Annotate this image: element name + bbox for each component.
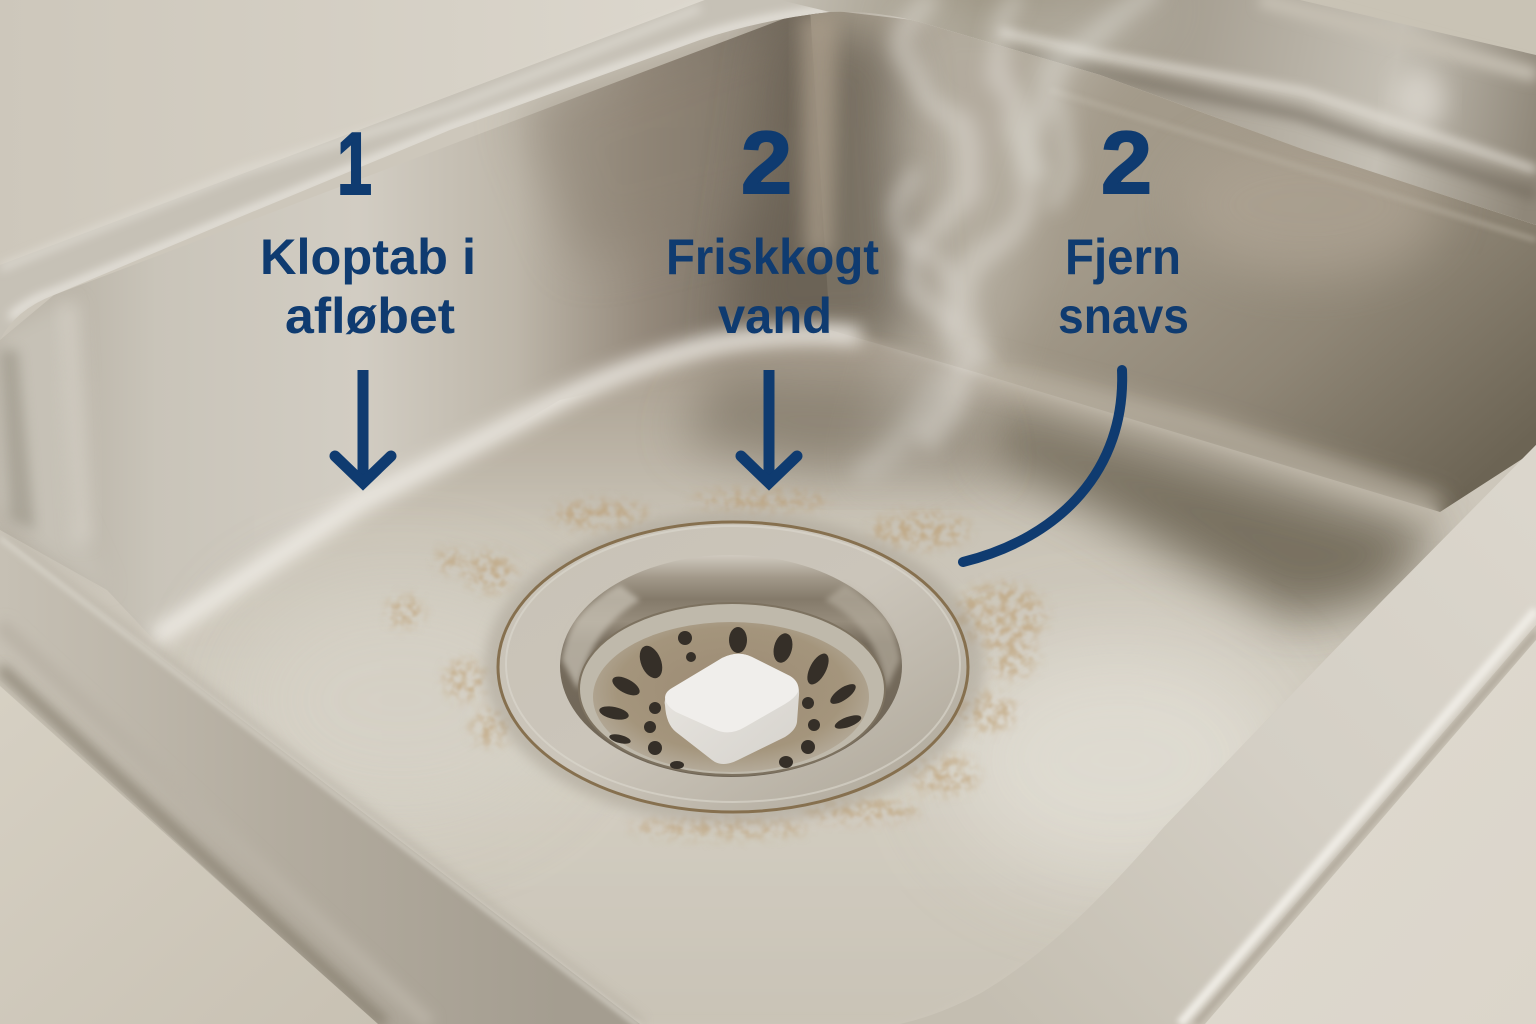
step 1 label: afløbet	[285, 288, 455, 344]
wall-floor highlight right	[975, 370, 1440, 508]
drain well	[560, 555, 902, 777]
rim front right	[900, 445, 1536, 1024]
counter bottom right	[1205, 640, 1536, 1024]
step 3 label	[1058, 229, 1189, 344]
steam	[860, 0, 1175, 480]
strainer basket	[579, 603, 885, 775]
right wall	[810, 8, 1536, 512]
counter bottom left	[0, 686, 378, 1024]
rim front left	[0, 535, 640, 1024]
left wall	[0, 5, 830, 640]
drain	[484, 512, 984, 824]
step 3	[963, 113, 1189, 562]
arrow: curved pointer to stains	[963, 370, 1122, 562]
step 2 label: Friskkogt	[666, 229, 879, 285]
step 2 number: 2	[741, 113, 792, 212]
flange	[498, 522, 968, 812]
step 3 label: Fjern	[1065, 229, 1181, 285]
left wall upper shade	[514, 19, 782, 244]
step 1	[260, 114, 476, 483]
step 2 label: vand	[718, 288, 832, 344]
floor dark reflection centre	[680, 370, 990, 470]
strainer holes	[598, 627, 863, 769]
steam haze	[860, 0, 1175, 480]
steam wisps	[865, 0, 1150, 470]
arrow: step 1 down	[335, 370, 391, 483]
step 1 label: Kloptab i	[260, 229, 476, 285]
icon: dishwasher tablet	[665, 654, 799, 764]
floor dark reflection right	[990, 405, 1440, 620]
floor bright right	[950, 640, 1290, 880]
step 3 number: 2	[1101, 113, 1152, 212]
back corner	[730, 20, 920, 350]
stains around the drain	[387, 490, 1046, 838]
drain dimple	[484, 512, 984, 824]
arrow: step 2 down	[741, 370, 797, 483]
counter top right	[1300, 0, 1536, 55]
rim top right	[780, 0, 1536, 225]
step 1 number: 1	[337, 114, 372, 213]
step 2 label	[666, 229, 879, 344]
wall-floor highlight left	[154, 333, 860, 638]
step 2	[666, 113, 879, 483]
floor	[349, 332, 1442, 524]
counter top left	[0, 0, 705, 265]
near lip shadow	[0, 535, 640, 1024]
step 1 label	[260, 229, 476, 344]
rim top left	[0, 0, 900, 340]
step 3 label: snavs	[1058, 288, 1189, 344]
